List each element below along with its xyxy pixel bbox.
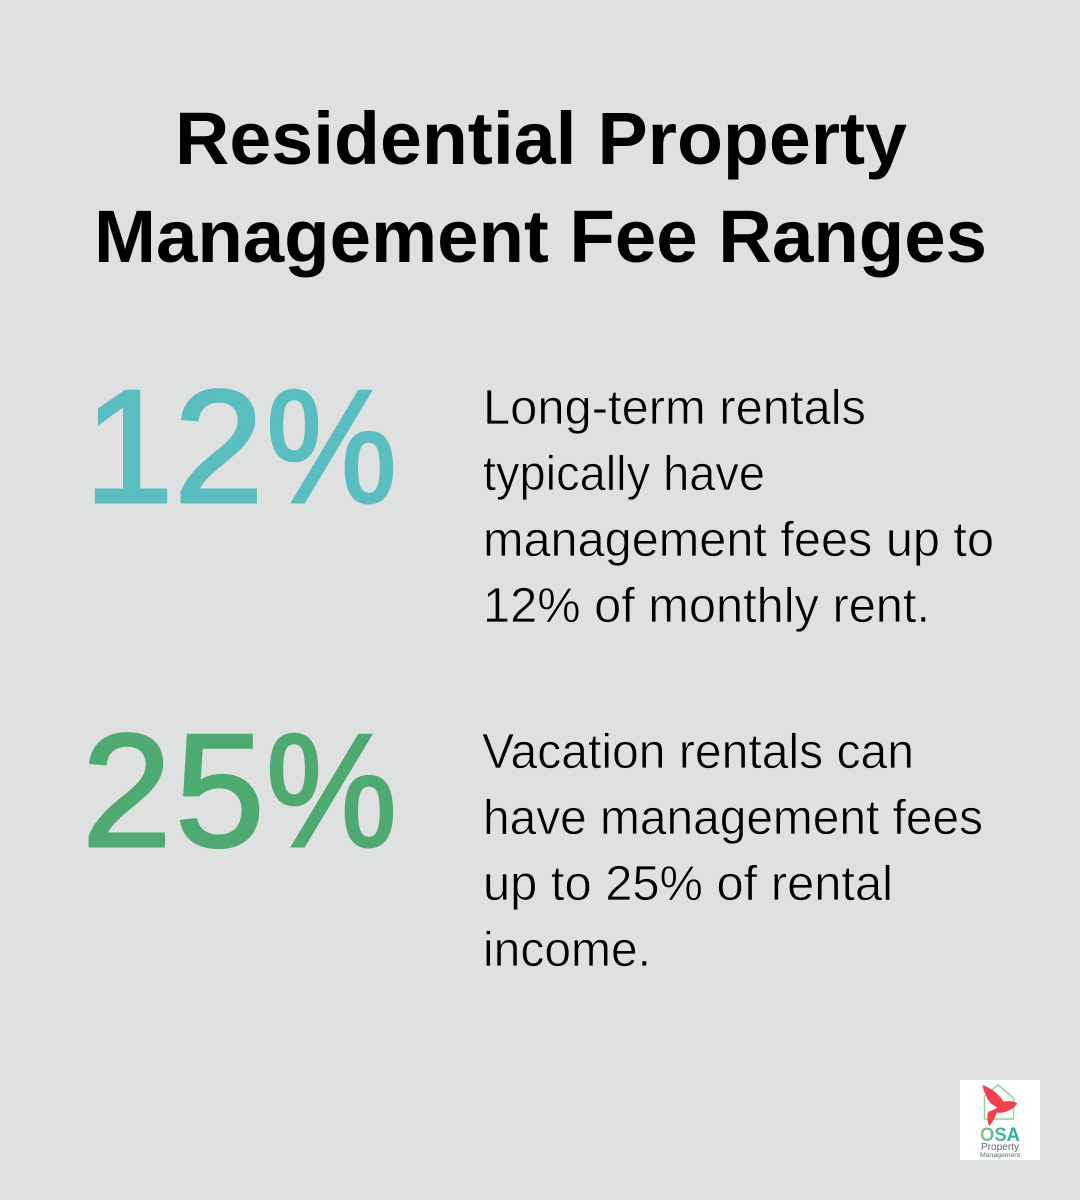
stat: 25% <box>82 701 397 881</box>
text block: long-term rentals: management fees up to <box>483 513 994 567</box>
logo subtitle 2: Management <box>980 1152 1020 1159</box>
text block: long-term rentals: 12% of monthly rent. <box>483 579 930 633</box>
title <box>94 97 987 278</box>
text block: vacation rentals: Vacation rentals can <box>482 725 914 779</box>
text block: vacation rentals: up to 25% of rental <box>483 857 893 911</box>
stat: 25%: % <box>266 701 397 881</box>
stat: 25%: 25 <box>82 701 265 881</box>
text block: vacation rentals <box>482 725 983 977</box>
stat: 12% <box>84 357 397 537</box>
logo subtitle: Property <box>981 1142 1019 1153</box>
text block: long-term rentals <box>483 381 994 633</box>
title: Management Fee Ranges <box>94 195 987 278</box>
stat: 12%: 12 <box>84 357 264 537</box>
text block: vacation rentals: income. <box>483 923 651 977</box>
logo wordmark: OSA <box>980 1125 1020 1146</box>
stat: 12%: % <box>266 357 397 537</box>
icon: house outline <box>984 1085 1014 1119</box>
text block: long-term rentals: Long-term rentals <box>483 381 866 435</box>
title: Residential Property <box>175 97 907 180</box>
icon: red bird <box>983 1085 1017 1126</box>
text block: long-term rentals: typically have <box>483 447 765 501</box>
logo: OSA Property Management <box>960 1080 1040 1160</box>
text block: vacation rentals: have management fees <box>483 791 983 845</box>
